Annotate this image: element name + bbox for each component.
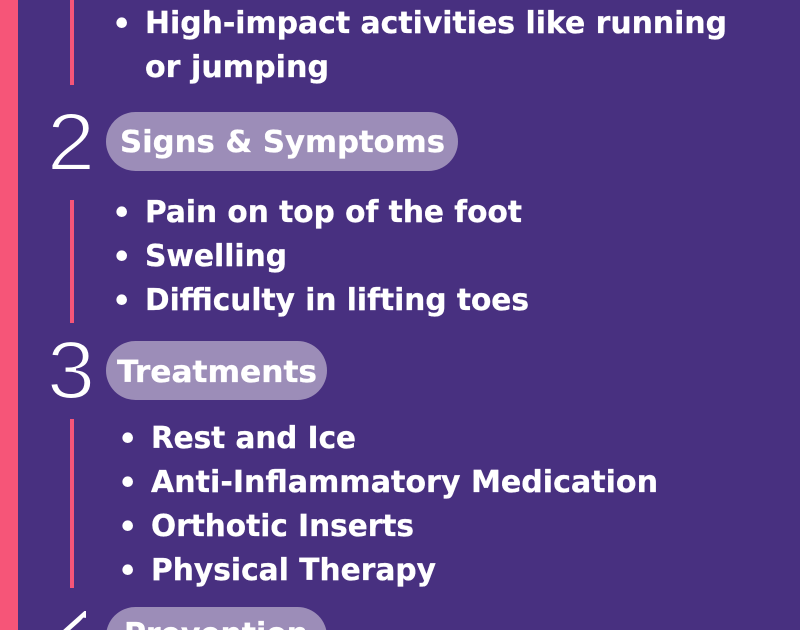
heading pill: prevention xyxy=(106,607,327,630)
bullet: orthotic inserts: Orthotic Inserts xyxy=(151,509,414,544)
heading pill: signs and symptoms: Signs & Symptoms xyxy=(120,125,445,160)
number 3: 3 xyxy=(47,325,95,416)
bullet: high-impact activities: or jumping xyxy=(145,50,329,85)
section 3: treatments xyxy=(47,325,658,588)
bullet: pain on top of the foot: Pain on top of the foot xyxy=(145,195,522,230)
bullet: swelling: Swelling xyxy=(145,239,287,274)
bullet: high-impact activities: High-impact activities like running xyxy=(145,6,727,41)
bullet: high-impact activities xyxy=(116,6,727,85)
section 3 vertical bar xyxy=(70,419,74,588)
left accent strip xyxy=(0,0,18,630)
heading pill: treatments: Treatments xyxy=(117,355,317,390)
bullet: physical therapy: Physical Therapy xyxy=(151,553,436,588)
section 2 vertical bar xyxy=(70,200,74,323)
heading pill: signs and symptoms xyxy=(106,112,458,171)
bullet: difficulty in lifting toes: Difficulty in lifting toes xyxy=(145,283,529,318)
bullet: anti-inflammatory medication: Anti-Inflammatory Medication xyxy=(151,465,658,500)
section 1 vertical bar xyxy=(70,0,74,85)
section 4: prevention xyxy=(63,607,326,630)
heading pill: treatments xyxy=(106,341,327,400)
section 1 list tail xyxy=(70,0,727,85)
section 2: signs and symptoms xyxy=(47,97,529,323)
bullet: rest and ice: Rest and Ice xyxy=(151,421,356,456)
number 2: 2 xyxy=(47,97,95,188)
